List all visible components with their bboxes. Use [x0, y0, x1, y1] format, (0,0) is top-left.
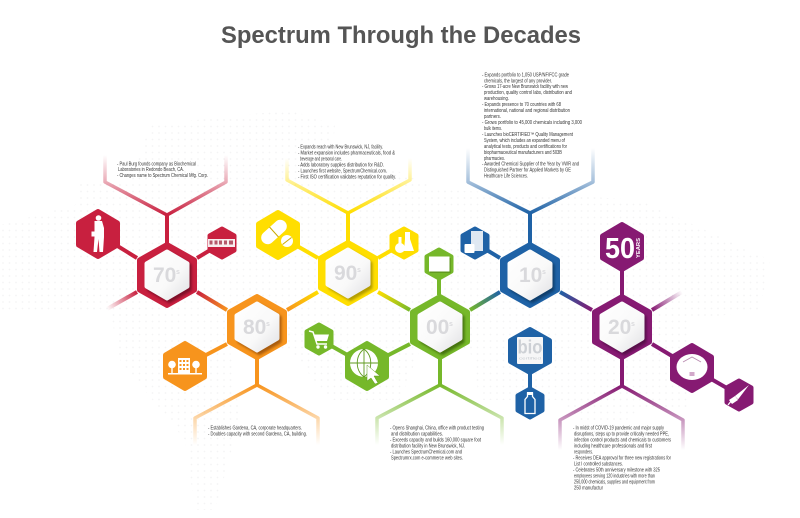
text block: 2000s milestones: Spectrumrx.com e-commerce web sites.: [391, 456, 463, 462]
text block: 1980s milestones: [208, 426, 307, 438]
decade node: 80s: s: [266, 321, 270, 328]
icon: tablet: [426, 250, 452, 278]
text block: 2000s milestones: distribution facility in New Brunswick, NJ.: [391, 444, 465, 450]
text block: 1970s milestones: - Changes name to Spectrum Chemical Mfg. Corp.: [117, 173, 208, 179]
text block: 2020s milestones: including healthcare professionals and first: [574, 444, 653, 450]
text block: 2000s milestones: - Exceeds capacity and builds 160,000 square foot: [390, 438, 481, 444]
text block: 2010s milestones: [482, 72, 582, 180]
text block: 1970s milestones: [117, 161, 208, 179]
text block: 2020s milestones: infection control products and chemicals to customers: [574, 438, 671, 444]
icon: syringe: [726, 380, 752, 410]
decade node: 90s: 90: [334, 262, 357, 285]
text block: 1970s milestones: Laboratories in Redondo Beach, CA.: [118, 167, 184, 173]
decade node: 20s: s: [631, 321, 635, 328]
text block: 2010s milestones: analytical tests, products and certifications for: [484, 144, 567, 150]
decade node: 70s: [140, 244, 194, 306]
text block: 1990s milestones: - Adds laboratory supplies distribution for R&D.: [298, 162, 384, 168]
decade node: 90s: s: [357, 267, 361, 274]
icon: flasks: [392, 228, 416, 258]
icon: pills: [258, 212, 298, 258]
text block: 2010s milestones: - Expands portfolio to 1,050 USP/NF/FCC grade: [482, 72, 569, 78]
icon: chemical packaging: [462, 228, 488, 258]
text block: 1970s milestones: - Paul Burg founds company as Biochemical: [117, 161, 196, 167]
decade node: 10s: 10: [519, 264, 542, 287]
text block: 2010s milestones: partners.: [484, 114, 501, 120]
text block: 2000s milestones: [390, 426, 484, 462]
icon: company sign: [208, 228, 235, 258]
text block: 2020s milestones: disruptions, steps up to provide critically needed PPE,: [574, 432, 669, 438]
text block: 1980s milestones: - Establishes Gardena, CA, corporate headquarters.: [208, 426, 302, 432]
icon: bottle: [518, 388, 542, 418]
text block: 2010s milestones: - Launches bioCERTIFIED™ Quality Management: [482, 132, 573, 138]
icon: bio certified: [510, 330, 550, 372]
decade node: 90s: [320, 242, 376, 304]
text block: 1990s milestones: - Launches first website, SpectrumChemical.com.: [298, 168, 387, 174]
text block: 2010s milestones: Healthcare Life Sciences.: [484, 174, 528, 180]
text block: 2010s milestones: production, quality control labs, distribution and: [484, 90, 572, 96]
text block: 2010s milestones: pharmacies.: [484, 156, 505, 162]
text block: 1990s milestones: - First ISO certification validates reputation for quality.: [298, 174, 396, 180]
text block: 1990s milestones: - Market expansion includes pharmaceuticals, food &: [298, 150, 396, 156]
icon: 50 years badge: 50: [605, 233, 635, 265]
icon: office building: [166, 344, 204, 388]
text block: 2020s milestones: List I controlled substances.: [574, 462, 623, 468]
text block: 2010s milestones: warehousing.: [484, 96, 509, 102]
text block: 1990s milestones: beverage and personal care.: [300, 156, 342, 162]
icon: globe with cursor: [348, 344, 386, 388]
text block: 2020s milestones: employees serving 120 industries with more than: [574, 474, 655, 480]
text block: 2020s milestones: [573, 426, 671, 492]
text block: 2010s milestones: biopharmaceutical manufacturers and 503B: [484, 150, 563, 156]
text block: 2020s milestones: - Receives DEA approval for three new registrations for: [573, 456, 671, 462]
icon: bio certified: bio: [518, 338, 542, 358]
decade node: 70s: s: [176, 269, 180, 276]
text block: 1990s milestones: - Expands reach with New Brunswick, NJ, facility.: [298, 144, 383, 150]
text block: 2000s milestones: - Opens Shanghai, China, office with product testing: [390, 426, 484, 432]
text block: 2010s milestones: - Grows portfolio to 45,000 chemicals including 3,000: [482, 120, 582, 126]
icon: face mask: [672, 346, 712, 390]
decade node: 20s: 20: [608, 316, 631, 339]
text block: 2020s milestones: 250 manufactur: [574, 486, 603, 492]
text block: 2020s milestones: - Celebrates 50th anniversary milestone with 325: [573, 468, 660, 474]
text block: 2010s milestones: - Expands presence to 70 countries with 68: [482, 102, 561, 108]
text block: 2010s milestones: bulk items.: [484, 126, 502, 132]
text block: 1990s milestones: [298, 144, 396, 180]
text block: 2020s milestones: 250,000 chemicals, supplies and equipment from: [574, 480, 655, 486]
icon: founder silhouette: [78, 212, 118, 256]
text block: 2010s milestones: - Grows 17-acre New Brunswick facility with new: [482, 84, 568, 90]
text block: 2010s milestones: chemicals, the largest of any provider.: [484, 78, 552, 84]
decade node: 70s: 70: [153, 264, 176, 287]
decade node: 80s: 80: [243, 316, 266, 339]
connector lines: [98, 148, 739, 450]
title: Spectrum Through the Decades: [221, 22, 581, 49]
decade node: 20s: [594, 296, 650, 358]
text block: 2010s milestones: - Awarded Chemical Supplier of the Year by VWR and: [482, 162, 579, 168]
text block: 1980s milestones: - Doubles capacity with second Gardena, CA, building.: [208, 432, 307, 438]
text block: 2010s milestones: Distinguished Partner for Applied Markets by GE: [484, 168, 572, 174]
text block: 2010s milestones: System, which includes an expanded menu of: [484, 138, 565, 144]
text block: 2000s milestones: and distribution capabilities.: [391, 432, 443, 438]
text block: 2000s milestones: - Launches SpectrumChemical.com and: [390, 450, 462, 456]
decade node: 80s: [230, 296, 284, 358]
text block: 2010s milestones: international, national and regional distribution: [484, 108, 570, 114]
decade node: 00s: [412, 296, 468, 358]
decade node: 10s: s: [542, 269, 546, 276]
decade node: 00s: s: [449, 321, 453, 328]
text block: 2020s milestones: responders.: [574, 450, 593, 456]
icon: 50 years badge: [602, 224, 642, 270]
icon: 50 years badge: YEARS: [636, 238, 642, 258]
icon: bio certified: certified: [519, 356, 541, 360]
decade node: 00s: 00: [426, 316, 449, 339]
decade node: 10s: [502, 244, 558, 306]
icon: shopping cart: [306, 324, 332, 354]
text block: 2020s milestones: - In midst of COVID-19 pandemic and major supply: [573, 426, 664, 432]
